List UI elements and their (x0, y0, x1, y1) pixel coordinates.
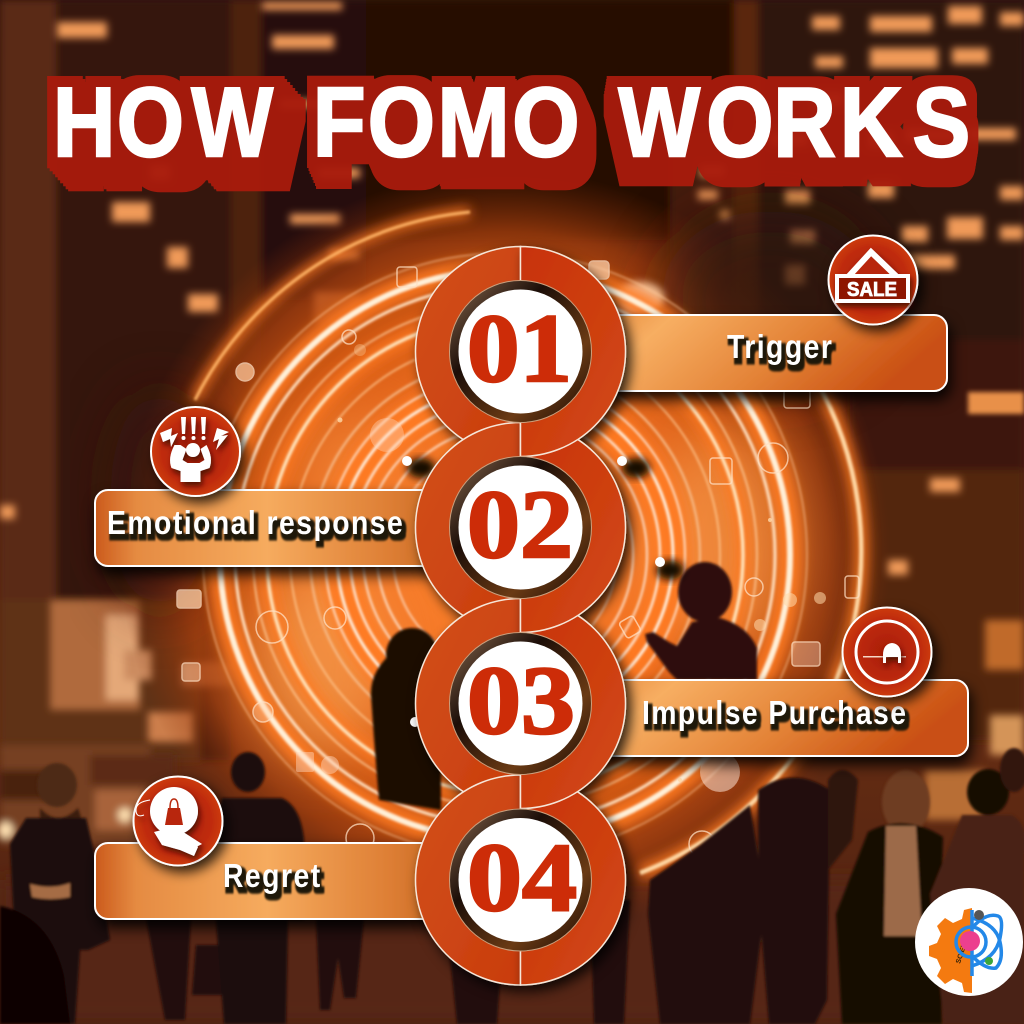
gear half (929, 908, 972, 993)
person: with bag (146, 918, 222, 1020)
icon: impulse purchase (842, 608, 932, 696)
title: WORKS (619, 67, 970, 177)
step 03 number: 03 (467, 647, 575, 755)
lit windows (0, 2, 1024, 575)
person: walking (316, 918, 364, 1010)
silhouette: man on phone (645, 562, 757, 680)
step 02 number: 02 (467, 471, 573, 579)
hot areas (250, 560, 390, 760)
lit strip (968, 392, 1024, 414)
silhouette: woman (371, 628, 441, 810)
ring lines (195, 212, 861, 873)
atom half (956, 910, 1002, 976)
bar: Trigger (600, 315, 947, 391)
person: man (208, 752, 304, 1024)
icon: hand holding shopping bag (134, 776, 222, 866)
step 02 number (450, 456, 592, 598)
step 01 number: 01 (467, 295, 572, 403)
ring halo (195, 212, 861, 873)
person: foreground head (0, 906, 70, 1024)
logo badge (915, 888, 1023, 996)
step 01 number (450, 280, 592, 422)
crowd silhouettes (0, 748, 1024, 1024)
step 03 number (450, 632, 592, 774)
label: Regret: Regret (223, 857, 320, 895)
lit shopfronts (50, 600, 1024, 820)
street (0, 880, 1024, 1024)
icon: sale sign (828, 236, 918, 324)
bar: Regret (95, 843, 440, 919)
step 04 number: 04 (467, 824, 577, 932)
label: Emotional response: Emotional response (107, 504, 403, 542)
step 04 number (450, 809, 592, 951)
buildings (0, 0, 1024, 760)
chain: interlocked rings (416, 246, 626, 985)
title: HOW (53, 67, 274, 177)
glowing concentric rings (110, 170, 890, 940)
person: woman with hair (836, 770, 943, 1024)
title: FOMO (313, 67, 580, 177)
label: Impulse Purchase: Impulse Purchase (642, 694, 906, 732)
bar: Emotional response (95, 490, 440, 566)
person: backpack (930, 748, 1024, 1024)
icon: stressed person (151, 407, 240, 496)
person: dark coats (445, 770, 858, 1024)
person: left woman (10, 763, 110, 1024)
sparkles (308, 344, 826, 782)
title (53, 67, 970, 177)
floating social icons (177, 261, 859, 857)
icon: sale sign: SALE (847, 279, 897, 301)
logo badge: SCIENCE (955, 933, 972, 965)
sparkle dots (402, 456, 684, 727)
traffic (0, 745, 175, 845)
label: Trigger: Trigger (727, 328, 832, 366)
bar: Impulse Purchase (600, 680, 968, 756)
